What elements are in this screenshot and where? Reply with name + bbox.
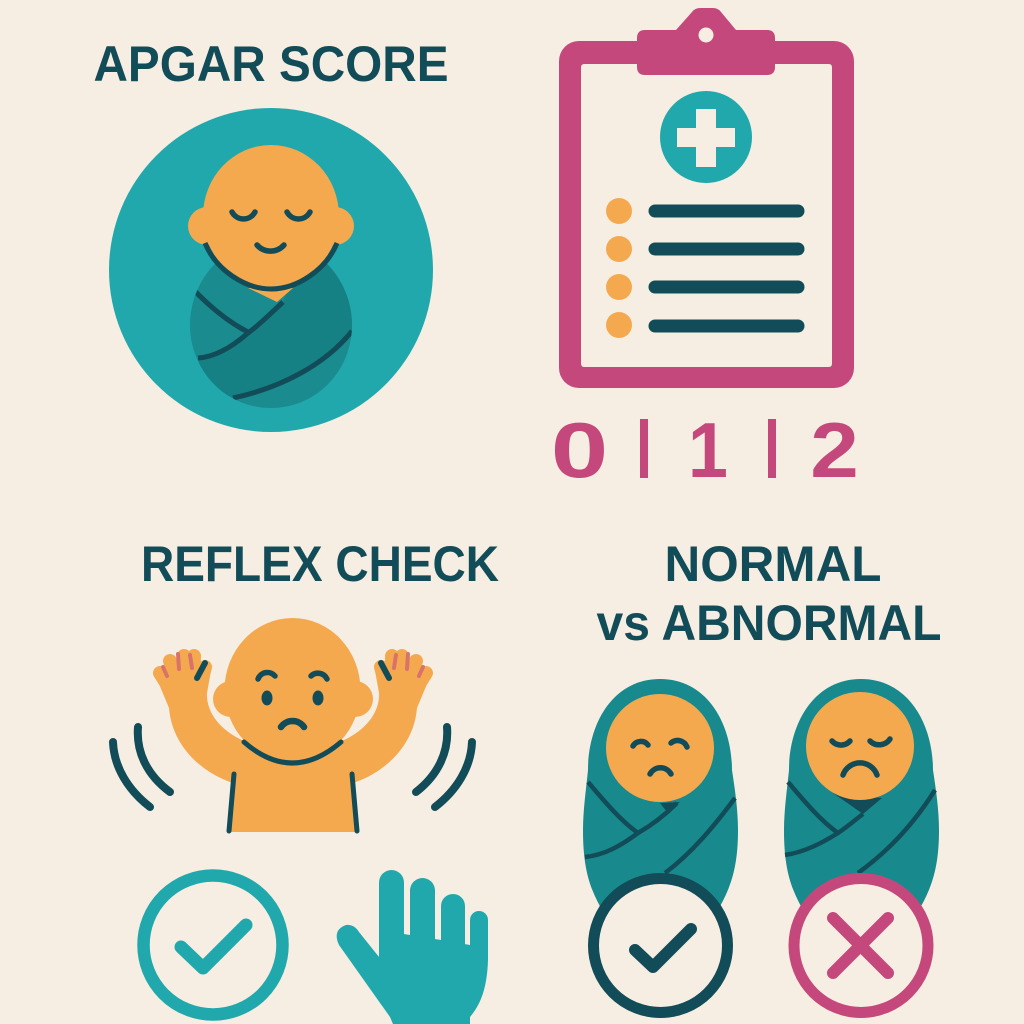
icon: medical clipboard	[559, 8, 854, 388]
swaddle body	[190, 264, 352, 408]
score scale 0 1 2	[551, 406, 859, 494]
icon: abnormal swaddled baby	[784, 679, 939, 915]
collar line	[244, 742, 341, 763]
icon: teal check circle	[144, 876, 282, 1014]
left arm and torso	[154, 654, 293, 832]
icon: normal swaddled baby	[583, 679, 738, 915]
heading: Normal vs Abnormal: NORMAL	[664, 536, 882, 592]
medical cross badge	[660, 91, 752, 183]
wrap lines	[785, 782, 935, 873]
paper	[581, 64, 832, 367]
motion arcs	[113, 727, 472, 807]
icon: swaddled sleeping baby in circle	[109, 108, 433, 432]
heading: Reflex Check: REFLEX CHECK	[141, 536, 499, 592]
score scale 0 1 2: 1	[688, 406, 728, 494]
wrap lines	[585, 782, 735, 873]
ears	[188, 207, 226, 245]
heading: Normal vs Abnormal: vs ABNORMAL	[596, 595, 942, 651]
icon: baby startle reflex	[113, 618, 472, 832]
teal background circle	[109, 108, 433, 432]
head	[203, 145, 339, 287]
ears	[213, 681, 249, 717]
right arm and torso	[293, 654, 432, 832]
icon: normal check badge	[594, 878, 728, 1012]
neck shadow	[833, 793, 882, 814]
sleeping face	[232, 212, 310, 251]
worried face	[258, 672, 327, 679]
clipboard frame	[559, 41, 854, 388]
head	[224, 618, 360, 762]
swaddle	[583, 679, 738, 915]
score scale 0 1 2: 0	[551, 407, 608, 494]
face	[806, 692, 914, 800]
heading: Normal vs Abnormal	[596, 536, 942, 651]
score scale 0 1 2: 2	[810, 406, 859, 494]
clip	[637, 8, 775, 75]
swaddle	[784, 679, 939, 915]
neck shadow	[660, 802, 680, 812]
title: Apgar Score: APGAR SCORE	[94, 36, 448, 92]
neck skin	[248, 288, 293, 302]
collar line	[205, 243, 337, 289]
checklist bullets	[606, 198, 632, 338]
icon: abnormal cross badge	[794, 878, 928, 1012]
face	[606, 694, 714, 802]
icon: teal hand	[337, 870, 488, 1024]
checklist lines	[655, 211, 798, 326]
